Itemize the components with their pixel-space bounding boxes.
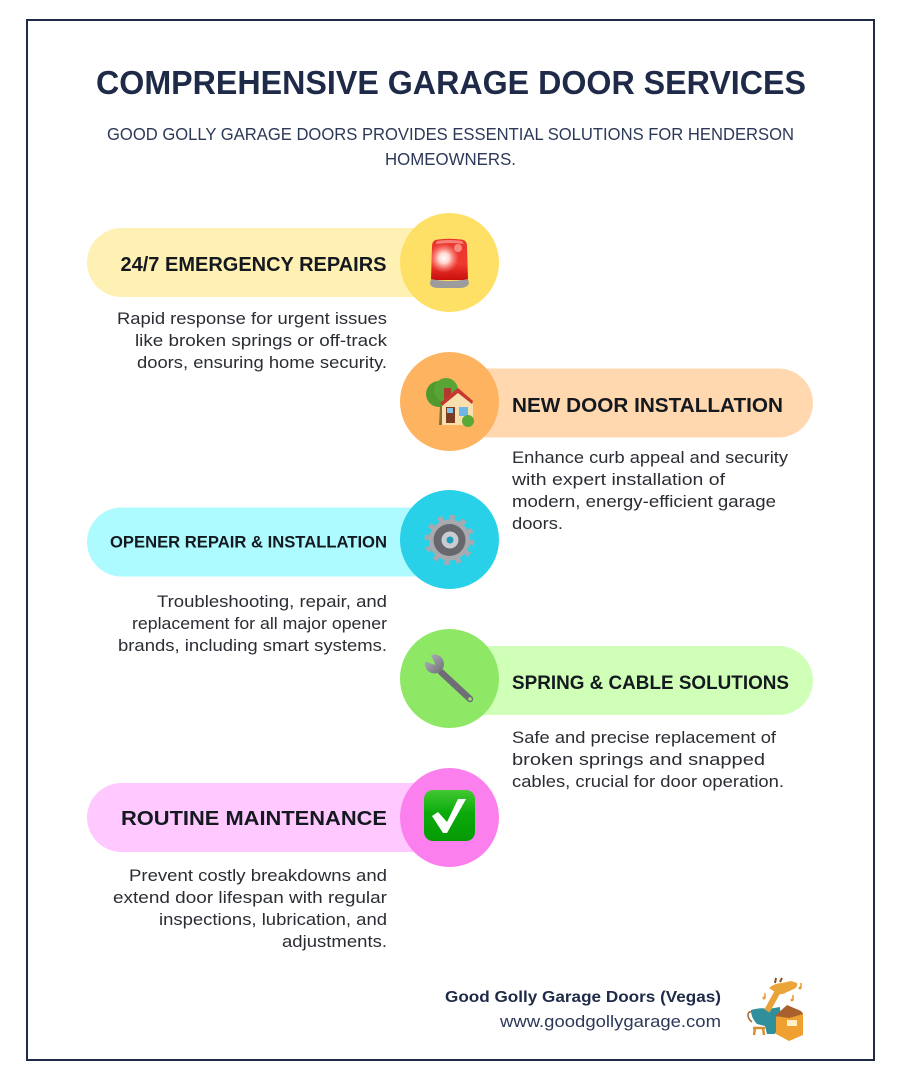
panel: routine maintenance xyxy=(87,768,499,951)
heading pill: spring and cable xyxy=(452,646,813,715)
description: routine maintenance: adjustments. xyxy=(282,932,387,951)
footer: company name and website: www.goodgollygarage.com xyxy=(499,1013,721,1031)
heading pill: opener repair xyxy=(87,508,447,576)
description: emergency repairs: Rapid response for urgent issues xyxy=(117,309,387,328)
heading pill: routine maintenance xyxy=(87,783,447,852)
subtitle xyxy=(107,124,794,169)
description: routine maintenance: Prevent costly breakdowns and xyxy=(129,866,387,885)
heading pill: spring and cable: SPRING & CABLE SOLUTIONS xyxy=(512,672,789,694)
icon circle: emergency siren xyxy=(400,213,499,312)
description: emergency repairs xyxy=(117,309,388,372)
description: opener repair: replacement for all major opener xyxy=(132,614,387,633)
description: new door installation: with expert installation of xyxy=(511,470,725,489)
subtitle: HOMEOWNERS. xyxy=(385,149,516,169)
icon circle: wrench xyxy=(400,629,499,728)
description: new door installation: Enhance curb appeal and security xyxy=(512,448,789,467)
description: routine maintenance: extend door lifespan with regular xyxy=(113,888,387,907)
description: new door installation: doors. xyxy=(512,514,563,533)
description: spring and cable: Safe and precise replacement of xyxy=(512,728,776,747)
panel: 24/7 emergency repairs xyxy=(87,213,499,372)
description: new door installation xyxy=(511,448,789,533)
heading pill: emergency repairs xyxy=(87,228,447,297)
description: spring and cable: cables, crucial for door operation. xyxy=(512,772,784,791)
heading pill: new door installation: NEW DOOR INSTALLATION xyxy=(512,395,783,417)
description: emergency repairs: doors, ensuring home security. xyxy=(137,353,387,372)
footer: company name and website: Good Golly Garage Doors (Vegas) xyxy=(445,989,721,1006)
footer: company name and website xyxy=(445,989,721,1031)
panel: spring and cable solutions xyxy=(400,629,813,791)
icon circle: house with tree xyxy=(400,352,499,451)
description: emergency repairs: like broken springs or off-track xyxy=(135,331,388,350)
icon circle: check mark xyxy=(400,768,499,867)
description: routine maintenance: inspections, lubrication, and xyxy=(159,910,387,929)
description: routine maintenance xyxy=(113,866,387,951)
panel: opener repair and installation xyxy=(87,490,499,655)
title: COMPREHENSIVE GARAGE DOOR SERVICES xyxy=(96,64,806,101)
heading pill: routine maintenance: ROUTINE MAINTENANCE xyxy=(121,808,387,830)
description: spring and cable xyxy=(512,728,784,791)
icon: giraffe logo xyxy=(748,978,803,1041)
heading pill: opener repair: OPENER REPAIR & INSTALLATION xyxy=(110,534,387,552)
description: opener repair xyxy=(118,592,387,655)
description: spring and cable: broken springs and snapped xyxy=(512,750,765,769)
description: opener repair: brands, including smart systems. xyxy=(118,636,387,655)
heading pill: emergency repairs: 24/7 EMERGENCY REPAIRS xyxy=(120,254,386,276)
icon circle: gear xyxy=(400,490,499,589)
description: opener repair: Troubleshooting, repair, and xyxy=(157,592,387,611)
description: new door installation: modern, energy-efficient garage xyxy=(512,492,776,511)
subtitle: GOOD GOLLY GARAGE DOORS PROVIDES ESSENTIAL SOLUTIONS FOR HENDERSON xyxy=(107,124,794,144)
panel: new door installation xyxy=(400,352,813,533)
heading pill: new door installation xyxy=(452,368,813,438)
